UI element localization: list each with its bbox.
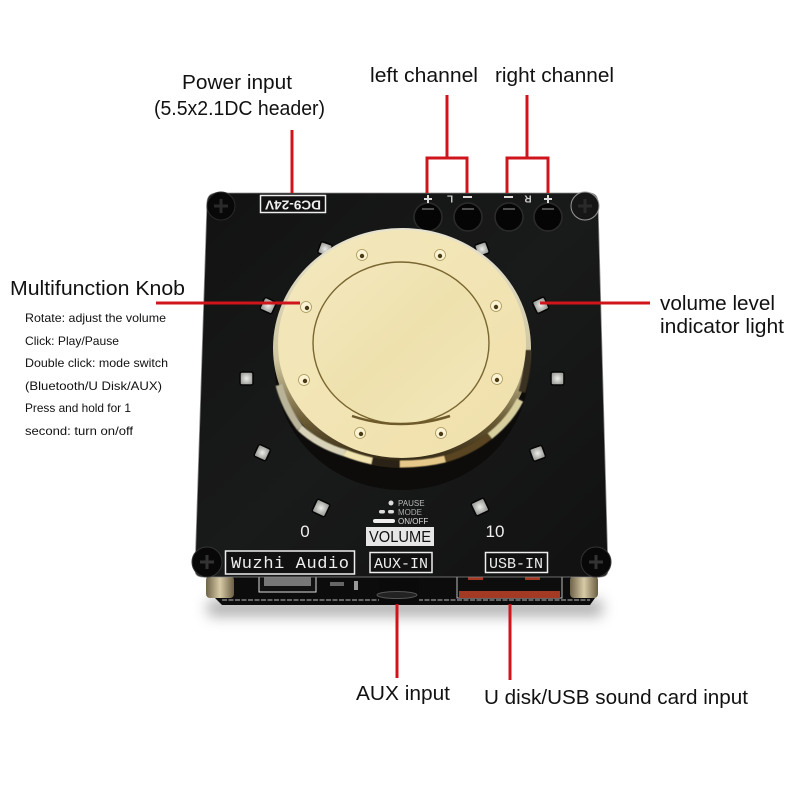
rim reflections	[279, 350, 528, 464]
arrow: power input	[290, 130, 294, 193]
USB socket	[457, 577, 562, 598]
arrow: left channel bracket	[427, 95, 467, 193]
brass standoffs	[206, 576, 598, 598]
speaker terminals: R	[524, 192, 532, 203]
top plate	[195, 193, 608, 577]
LED indicators	[240, 241, 564, 517]
mode legend: PAUSE	[398, 499, 425, 508]
label: power input: (5.5x2.1DC header)	[154, 98, 325, 120]
knob instructions	[25, 311, 168, 438]
aux-in label: AUX-IN	[374, 556, 428, 573]
label: volume level indicator	[660, 293, 784, 338]
screws	[192, 192, 611, 577]
knob studs	[298, 250, 502, 438]
power/micro connector on PCB	[259, 577, 358, 592]
volume label: VOLUME	[369, 529, 431, 546]
voltage label: DC9-24V	[265, 198, 321, 213]
knob	[273, 228, 531, 490]
arrow: volume indicator	[540, 302, 650, 304]
lower PCB	[207, 570, 597, 605]
arrow: usb input	[508, 604, 512, 680]
label: power input	[154, 72, 325, 120]
speaker terminals	[414, 192, 562, 231]
scale labels: 10	[486, 522, 504, 541]
knob instructions: second: turn on/off	[25, 424, 134, 438]
speaker terminals: L	[447, 192, 453, 203]
knob side	[275, 246, 529, 490]
scale labels: 0	[300, 522, 310, 541]
arrow: multifunction knob	[156, 302, 300, 304]
mode legend: ON/OFF	[398, 517, 428, 526]
knob rim	[273, 228, 531, 468]
brand label: Wuzhi Audio	[231, 555, 349, 574]
mode legend	[373, 499, 428, 526]
label: usb input: U disk/USB sound card input	[484, 687, 748, 709]
knob instructions: (Bluetooth/U Disk/AUX)	[25, 379, 162, 393]
label: power input: Power input	[182, 72, 292, 94]
knob instructions: Click: Play/Pause	[25, 334, 119, 348]
mode legend: MODE	[398, 508, 422, 517]
knob instructions: Rotate: adjust the volume	[25, 311, 166, 325]
board shadow	[208, 600, 602, 616]
scale labels	[300, 522, 504, 541]
label: volume level indicator: indicator light	[660, 316, 784, 338]
arrow: right channel bracket	[507, 95, 548, 193]
knob centre disc	[313, 262, 489, 424]
label: volume level indicator: volume level	[660, 293, 775, 315]
callout lines	[156, 95, 650, 680]
usb-in label: USB-IN	[489, 556, 543, 573]
label: aux input: AUX input	[356, 683, 450, 705]
label: left channel: left channel	[370, 65, 478, 87]
label: multifunction knob: Multifunction Knob	[10, 278, 185, 300]
device: audio amplifier board	[192, 192, 611, 616]
arrow: aux input	[396, 604, 398, 678]
knob instructions: Double click: mode switch	[25, 356, 168, 370]
knob instructions: Press and hold for 1	[25, 401, 131, 415]
knob face	[278, 230, 526, 458]
AUX jack	[377, 578, 419, 604]
label: right channel: right channel	[495, 65, 614, 87]
